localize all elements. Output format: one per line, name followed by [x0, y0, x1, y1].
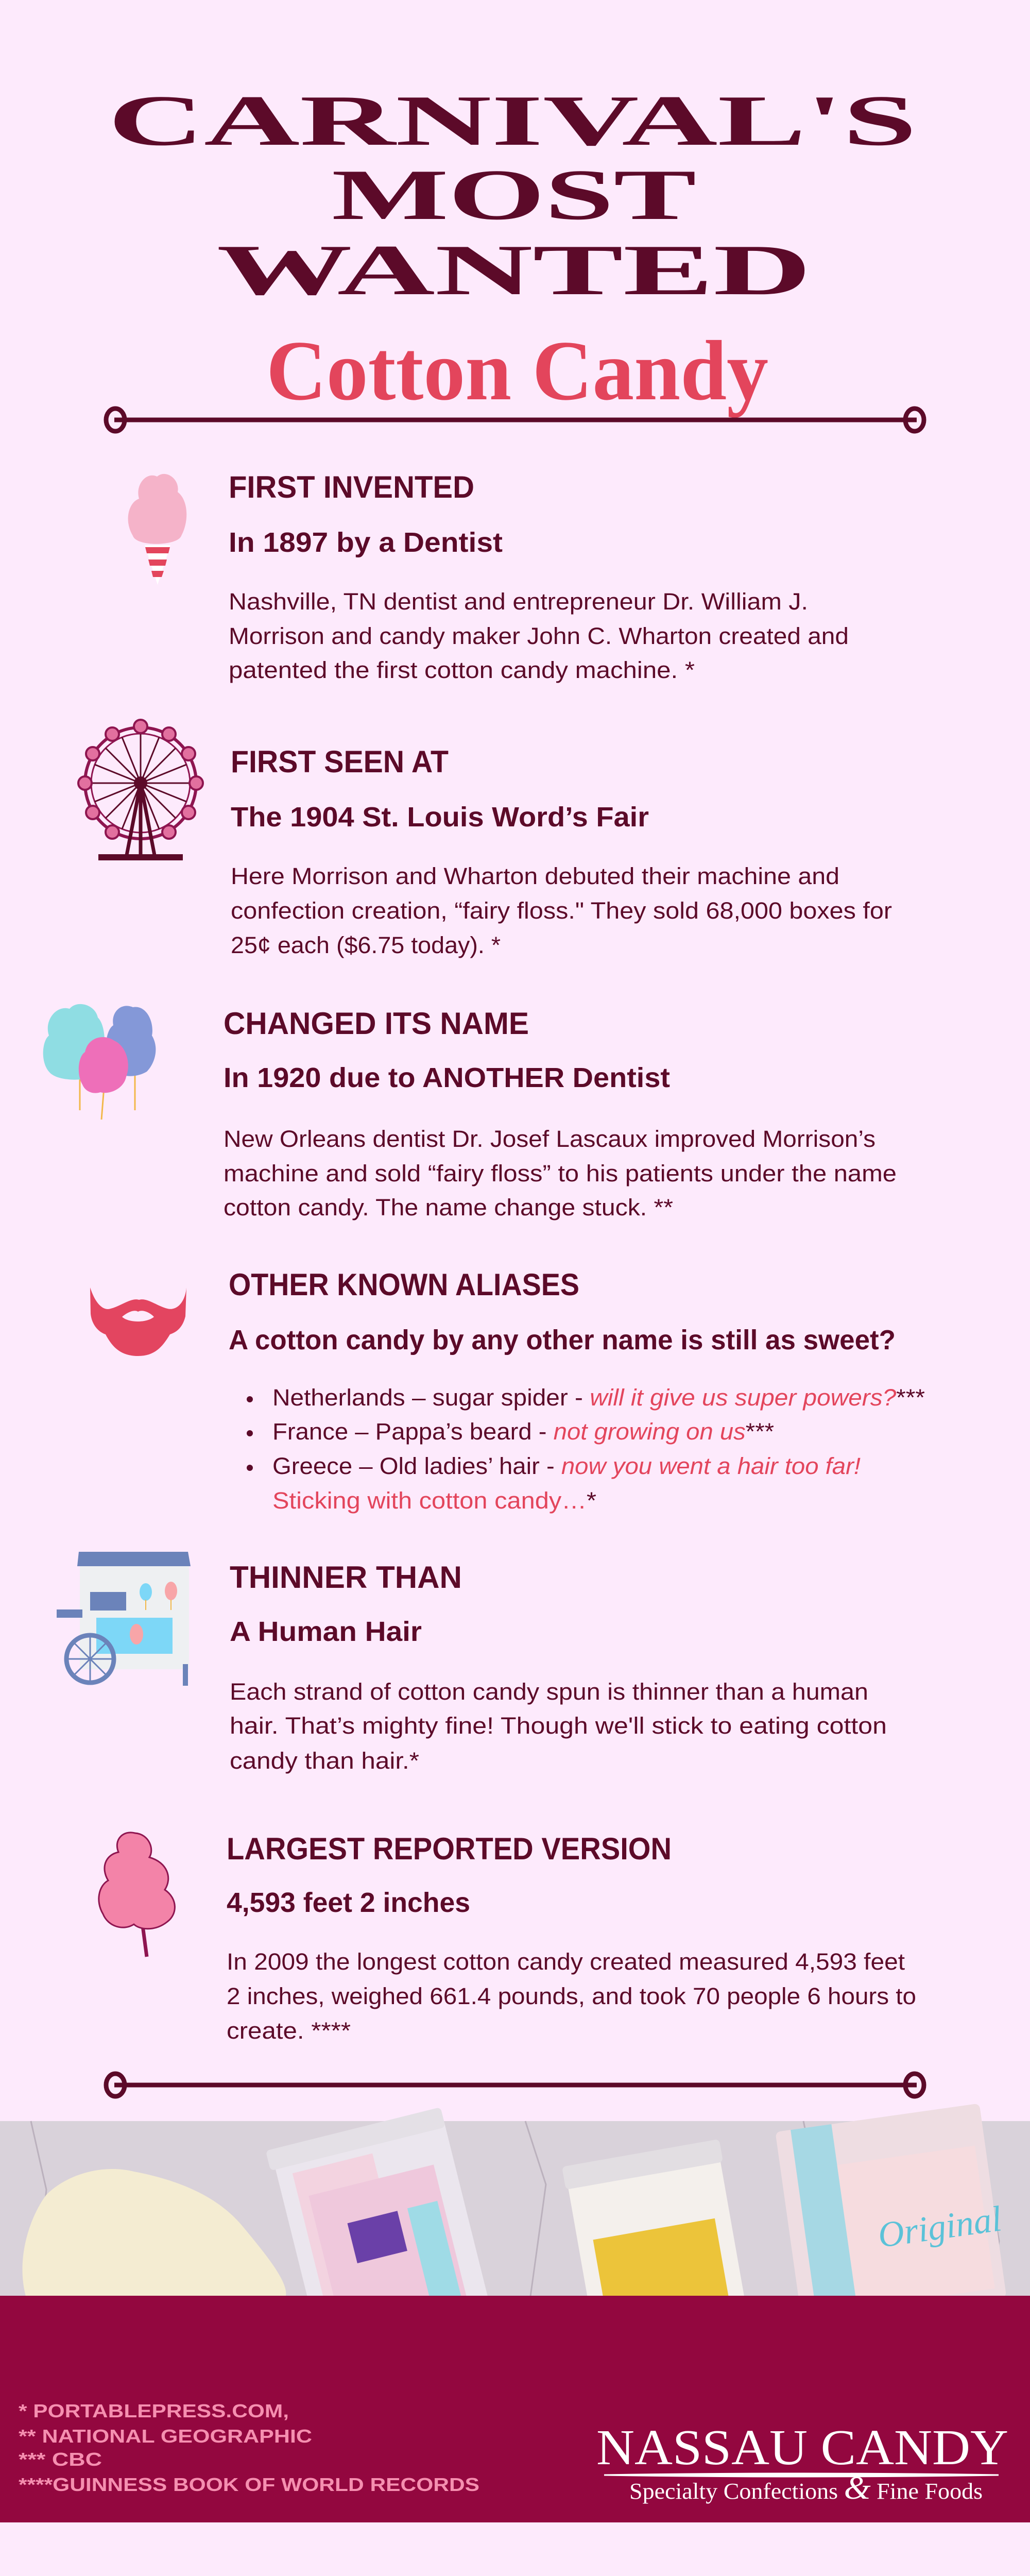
footer sources: ****GUINNESS BOOK OF WORLD RECORDS [19, 2474, 479, 2495]
logo: Nassau Candy [596, 2420, 1008, 2506]
title: CARNIVAL'S [108, 81, 917, 161]
bullet list: Greece – Old ladies’ hair - now you went a hair too far! [272, 1453, 861, 1479]
original cup [775, 2103, 1012, 2326]
icon: cotton candy cart [57, 1552, 191, 1686]
icon: ferris wheel [78, 720, 203, 860]
bullet list: Sticking with cotton candy… * [272, 1487, 596, 1514]
icon: cotton candy cone [128, 474, 186, 585]
body text: confection creation, “fairy floss." They sold 68,000 boxes for [231, 897, 892, 924]
icon: pink cotton candy [99, 1833, 175, 1957]
original cup: Original [876, 2199, 1004, 2256]
body text: cotton candy. The name change stuck. ** [224, 1194, 673, 1221]
body text: Nashville, TN dentist and entrepreneur Dr. William J. [229, 588, 808, 615]
logo: Nassau Candy: NASSAU CANDY [596, 2420, 1008, 2476]
bullet list: France – Pappa’s beard - not growing on us *** [272, 1418, 774, 1445]
body text [230, 1679, 887, 1774]
body text: Morrison and candy maker John C. Wharton created and [229, 623, 849, 649]
cotton pile [23, 2169, 286, 2296]
body text: candy than hair.* [230, 1748, 419, 1774]
body text: 2 inches, weighed 661.4 pounds, and took 70 people 6 hours to [227, 1983, 916, 2009]
subheading: A cotton candy by any other name is still as sweet? [229, 1325, 896, 1355]
title: WANTED [217, 230, 811, 310]
unicorn cup [266, 2107, 490, 2348]
footer sources: ** NATIONAL GEOGRAPHIC [19, 2426, 312, 2447]
divider top [106, 409, 924, 431]
body text: machine and sold “fairy floss” to his patients under the name [224, 1160, 897, 1187]
subheading: 4,593 feet 2 inches [227, 1887, 470, 1918]
body text: create. **** [227, 2018, 351, 2044]
footer band [0, 2296, 1030, 2522]
title: MOST [332, 155, 696, 235]
subheading: In 1897 by a Dentist [229, 527, 503, 558]
photo: cotton candy products [0, 2103, 1030, 2348]
divider bottom [106, 2074, 924, 2096]
body text [227, 1948, 916, 2044]
section 5: thinner than [57, 1552, 887, 1774]
section 1: first invented [128, 470, 849, 683]
body text: hair. That’s mighty fine! Though we'll stick to eating cotton [230, 1713, 887, 1739]
birthday cup [562, 2139, 748, 2329]
body text: 25¢ each ($6.75 today). * [231, 932, 501, 958]
body text: Each strand of cotton candy spun is thinner than a human [230, 1679, 868, 1705]
body text: Here Morrison and Wharton debuted their machine and [231, 863, 839, 889]
icon: cotton candy balloons [43, 1004, 156, 1120]
section 3: changed its name [43, 1004, 897, 1221]
heading: LARGEST REPORTED VERSION [227, 1832, 672, 1866]
body text [229, 588, 849, 683]
subheading: The 1904 St. Louis Word’s Fair [231, 802, 649, 833]
subtitle: Cotton Candy: Cotton Candy [266, 323, 768, 418]
heading: FIRST INVENTED [229, 470, 474, 504]
bullet list: Netherlands – sugar spider - will it give us super powers? *** [272, 1384, 925, 1411]
section 6: largest reported version [99, 1832, 916, 2044]
heading: OTHER KNOWN ALIASES [229, 1267, 579, 1302]
section 2: first seen at [78, 720, 892, 958]
title [108, 81, 917, 310]
body text: In 2009 the longest cotton candy created measured 4,593 feet [227, 1948, 905, 1975]
body text: New Orleans dentist Dr. Josef Lascaux improved Morrison’s [224, 1126, 876, 1152]
body text: patented the first cotton candy machine. * [229, 657, 695, 683]
footer sources: *** CBC [19, 2449, 102, 2470]
body text [231, 863, 892, 958]
footer sources [19, 2400, 479, 2495]
section 4: other known aliases [90, 1267, 925, 1514]
heading: CHANGED ITS NAME [224, 1006, 529, 1041]
icon: beard [90, 1287, 186, 1356]
logo: Nassau Candy: Specialty Confections & Fine Foods [629, 2469, 983, 2506]
subheading: In 1920 due to ANOTHER Dentist [224, 1062, 670, 1093]
footer sources: * PORTABLEPRESS.COM, [19, 2400, 289, 2421]
bullet list [247, 1384, 925, 1514]
body text [224, 1126, 897, 1221]
heading: THINNER THAN [230, 1560, 462, 1595]
subheading: A Human Hair [230, 1616, 422, 1647]
heading: FIRST SEEN AT [231, 744, 449, 779]
